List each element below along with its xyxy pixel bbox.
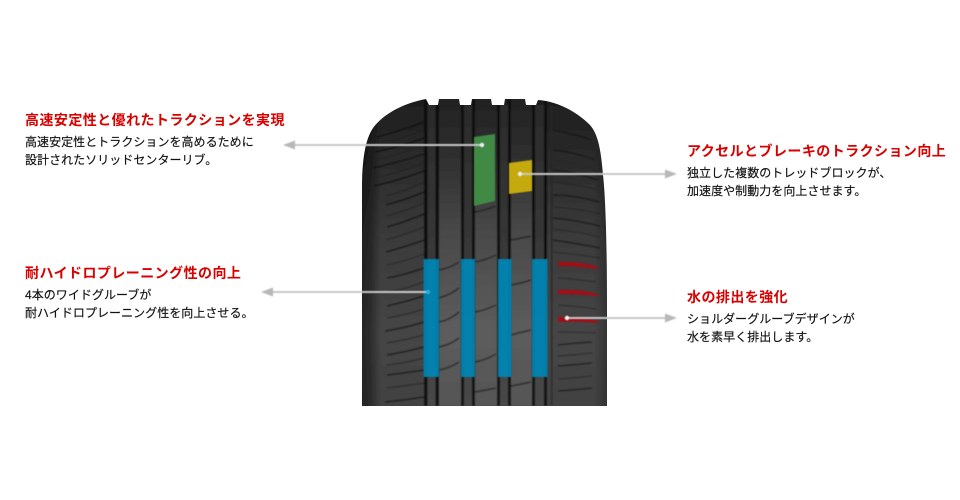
left shoulder fine lines <box>386 130 426 388</box>
callout: water drainage: 水を素早く排出します。 <box>687 330 818 344</box>
blue wide grooves <box>424 259 548 377</box>
callout: water drainage: 水の排出を強化 <box>687 289 788 305</box>
green center rib highlight <box>474 134 495 206</box>
center ribs <box>439 99 532 406</box>
callout: hydroplaning resistance: 耐ハイドロプレーニング性の向上 <box>25 265 241 281</box>
tire tread <box>355 95 615 410</box>
callout: hydroplaning resistance <box>25 265 254 320</box>
left shoulder sipes <box>373 122 424 402</box>
right shoulder fine lines <box>550 204 600 405</box>
circumferential grooves <box>424 105 547 406</box>
arrow: acceleration and braking <box>518 170 677 178</box>
callout: high speed stability and traction <box>25 112 285 167</box>
callout: hydroplaning resistance: 4本のワイドグルーブが <box>25 288 151 302</box>
tire illustration with callout arrows <box>261 99 677 406</box>
rib lateral sipes <box>439 206 531 392</box>
callout: acceleration and braking traction <box>687 143 946 198</box>
yellow tread block highlight <box>509 160 532 194</box>
side shading <box>362 130 607 406</box>
callout: acceleration and braking traction: 独立した複数のトレッドブロックが、 <box>687 166 891 180</box>
callout: high speed stability and traction: 高速安定性と優れたトラクションを実現 <box>25 112 285 128</box>
callout: hydroplaning resistance: 耐ハイドロプレーニング性を向上させる。 <box>25 306 254 320</box>
arrow: hydroplaning <box>261 288 430 296</box>
callout: high speed stability and traction: 設計されたソリッドセンターリブ。 <box>25 153 217 167</box>
arrow: water drainage <box>565 314 677 322</box>
right shoulder sipes <box>553 130 600 391</box>
callout: water drainage: ショルダーグルーブデザインが <box>687 312 855 326</box>
callout: acceleration and braking traction: 加速度や制動力を向上させます。 <box>687 184 866 198</box>
red shoulder grooves <box>558 262 598 323</box>
callout: acceleration and braking traction: アクセルとブレーキのトラクション向上 <box>687 143 946 159</box>
callout: high speed stability and traction: 高速安定性とトラクションを高めるために <box>25 135 254 149</box>
callout: water drainage <box>687 289 855 344</box>
arrow: high speed stability <box>283 140 484 150</box>
